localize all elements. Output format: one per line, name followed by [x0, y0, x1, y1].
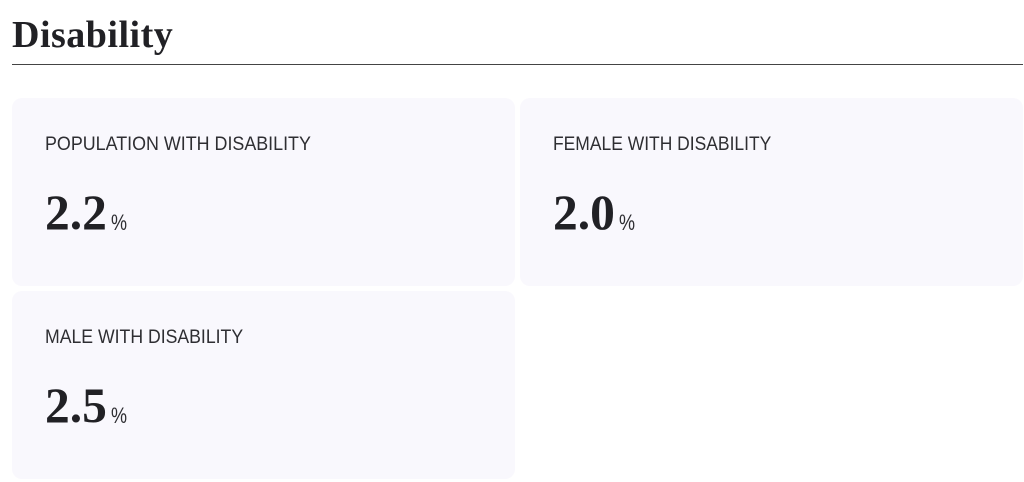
- panel: female with disability: [520, 98, 1023, 286]
- panel: male with disability: 2.5: [45, 378, 107, 433]
- panel: male with disability: [12, 291, 515, 479]
- panel: population with disability: POPULATION WITH DISABILITY: [45, 134, 311, 155]
- panel: population with disability: 2.2: [45, 185, 107, 240]
- panel: population with disability: %: [111, 210, 127, 235]
- panel: female with disability: FEMALE WITH DISABILITY: [553, 134, 771, 155]
- title: Disability: [12, 14, 173, 56]
- panel: male with disability: %: [111, 403, 127, 428]
- panel: population with disability: [12, 98, 515, 286]
- panel: female with disability: 2.0: [553, 185, 615, 240]
- panel: female with disability: %: [619, 210, 635, 235]
- panel: male with disability: MALE WITH DISABILITY: [45, 327, 243, 348]
